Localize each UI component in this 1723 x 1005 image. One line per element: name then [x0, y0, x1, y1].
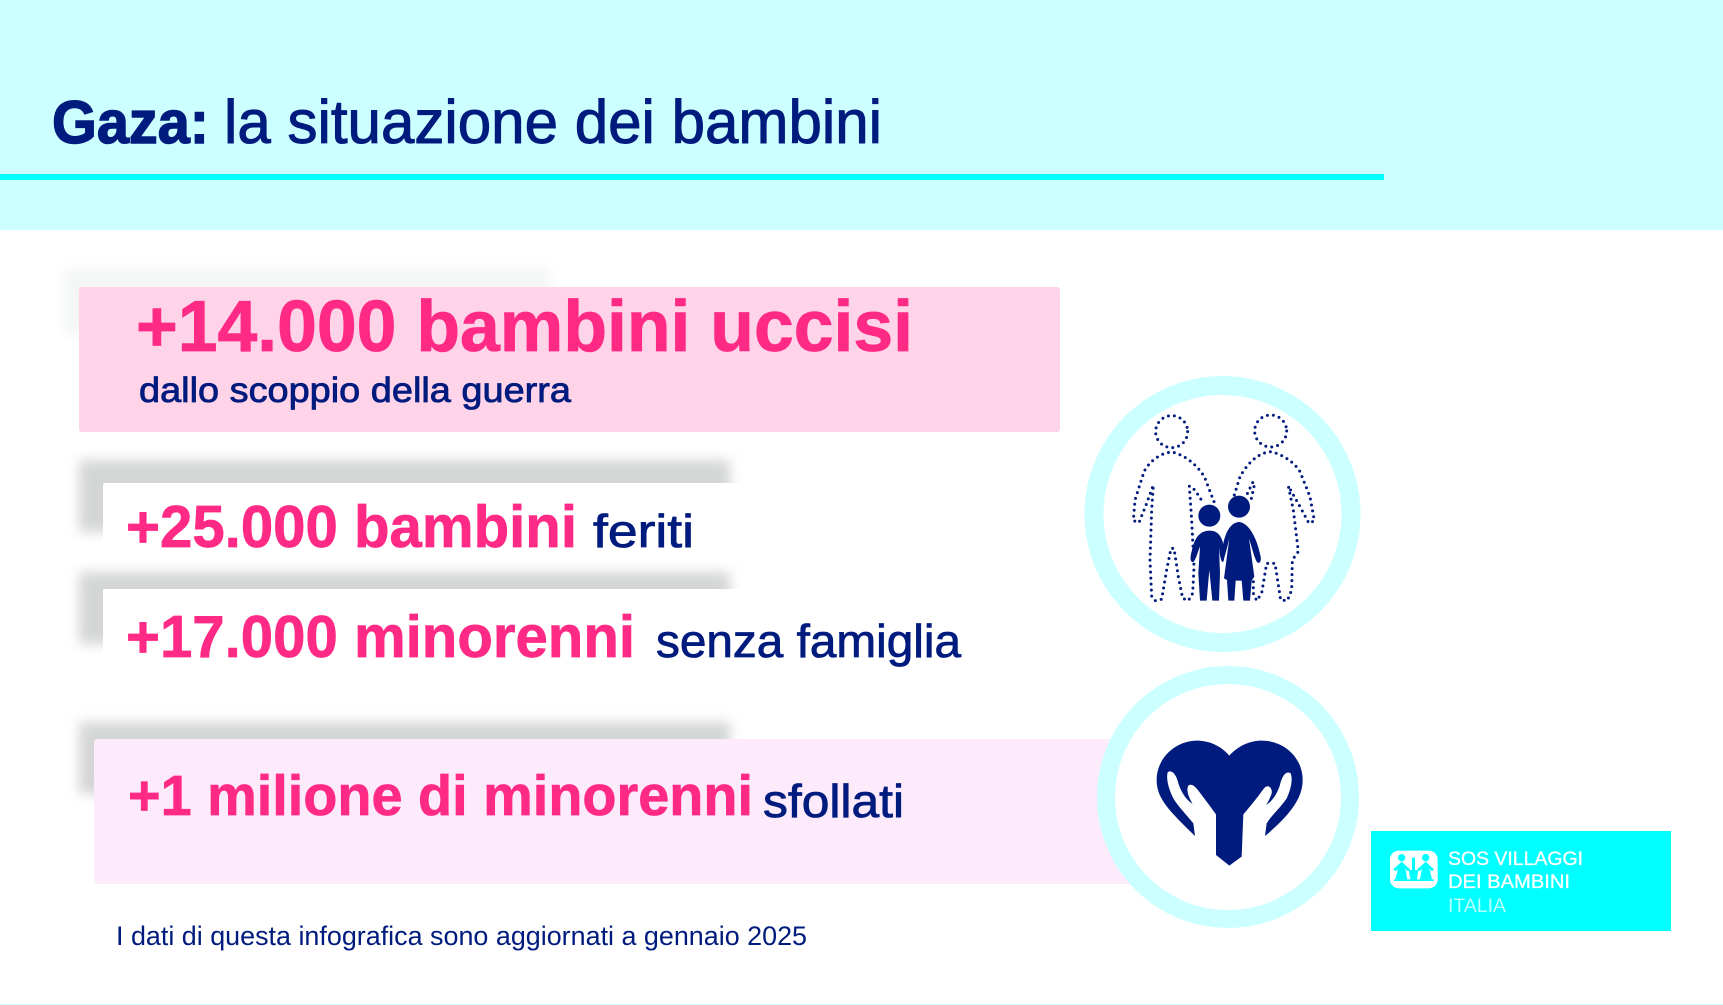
- logo: SOS Villaggi dei Bambini: DEI BAMBINI: [1448, 872, 1570, 893]
- panel: bambini uccisi: +14.000 bambini uccisi: [136, 287, 913, 367]
- logo: SOS Villaggi dei Bambini: [1371, 831, 1671, 931]
- icon: heart in hands circle: [1106, 675, 1350, 919]
- panel: minorenni senza famiglia: [79, 572, 961, 679]
- panel: minorenni senza famiglia: +17.000 minorenni: [126, 604, 635, 670]
- icon: family circle: [1094, 386, 1351, 642]
- panel: minorenni sfollati: [79, 722, 1144, 884]
- title: la situazione dei bambini: [224, 88, 882, 156]
- logo: SOS Villaggi dei Bambini: ITALIA: [1448, 896, 1506, 917]
- panel: minorenni senza famiglia: senza famiglia: [656, 615, 961, 667]
- header band: [0, 0, 1723, 230]
- panel: bambini feriti: feriti: [593, 505, 694, 557]
- logo: SOS Villaggi dei Bambini: SOS VILLAGGI: [1448, 849, 1583, 870]
- panel: bambini feriti: [79, 460, 743, 573]
- title: Gaza:: [52, 89, 209, 156]
- panel: bambini uccisi: [64, 268, 1060, 432]
- panel: minorenni sfollati: +1 milione di minorenni: [128, 764, 753, 828]
- footnote: I dati di questa infografica sono aggiornati a gennaio 2025: [116, 921, 807, 951]
- panel: minorenni sfollati: sfollati: [763, 775, 904, 827]
- panel: bambini uccisi: dallo scoppio della guerra: [139, 371, 572, 410]
- panel: bambini feriti: +25.000 bambini: [126, 494, 577, 560]
